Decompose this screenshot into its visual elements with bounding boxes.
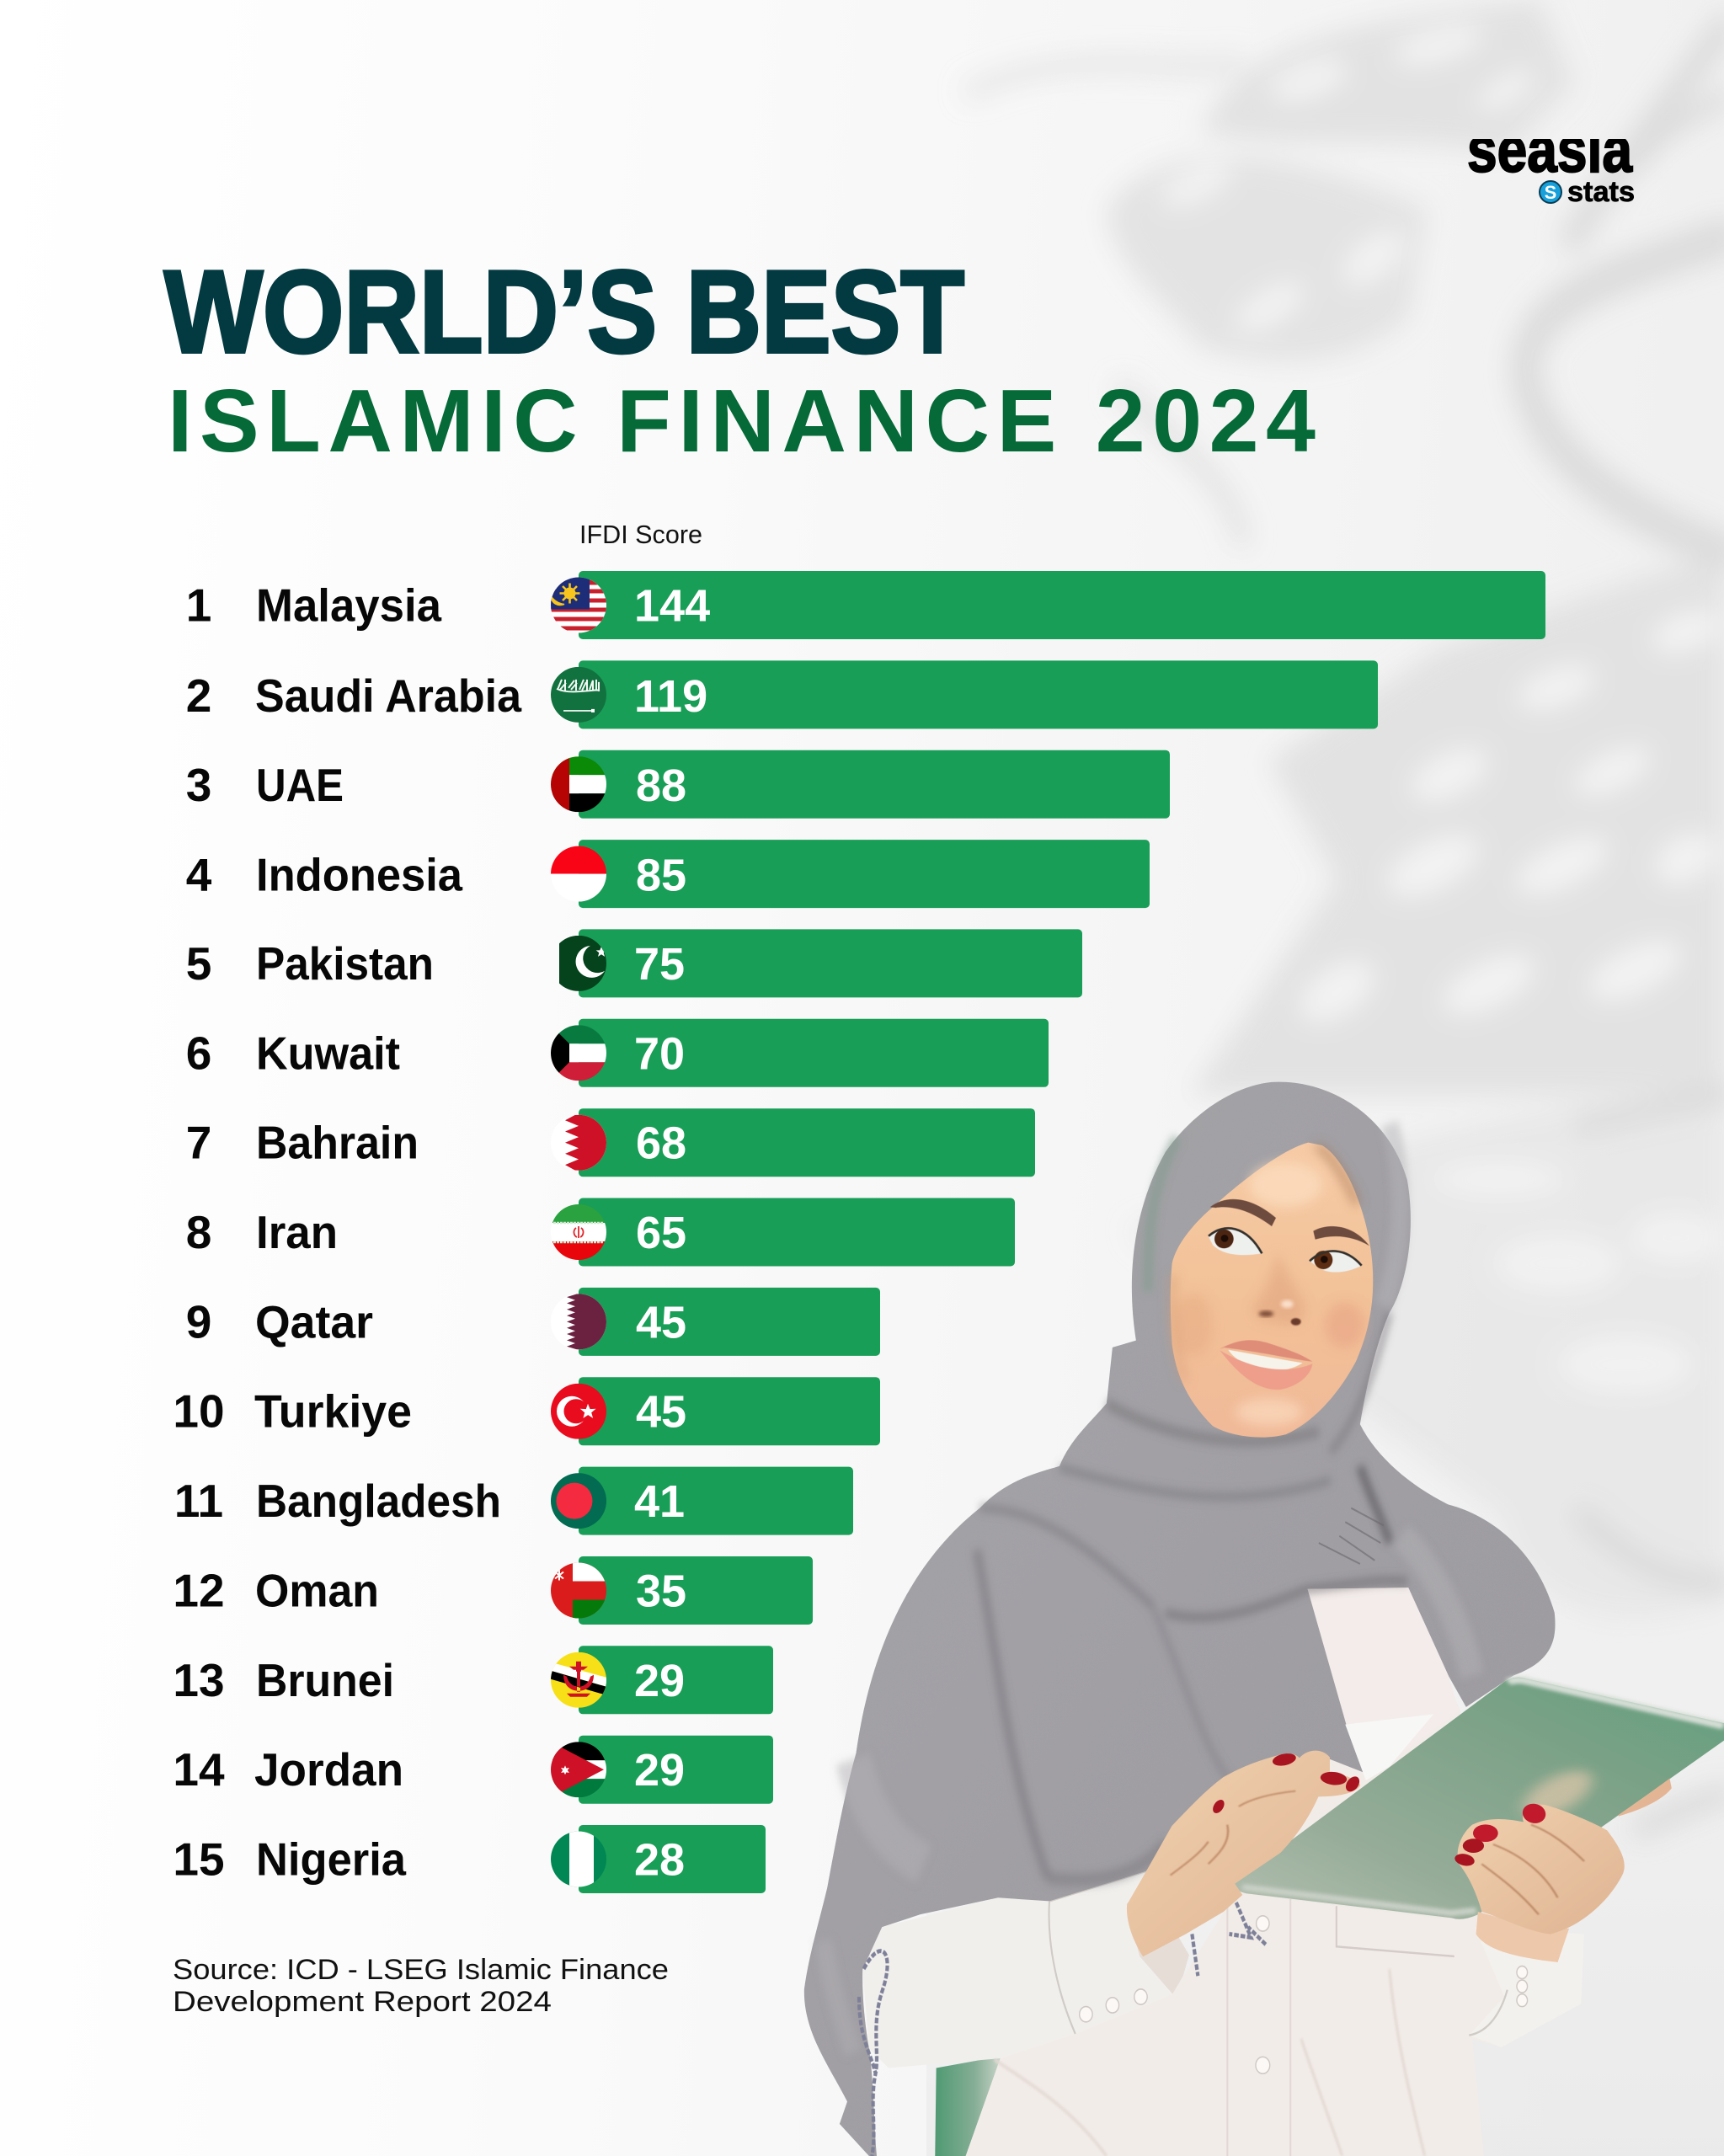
flag: Malaysia xyxy=(551,578,606,633)
row 8: Iran: 65 xyxy=(636,1208,686,1258)
row 1: Malaysia: 144 xyxy=(634,581,710,632)
row 11: Bangladesh: Bangladesh xyxy=(256,1475,501,1527)
row 1: Malaysia xyxy=(186,571,1545,639)
row 3: UAE xyxy=(186,750,1170,819)
subtitle: ISLAMIC FINANCE 2024 xyxy=(168,371,1316,471)
row 5: Pakistan: 5 xyxy=(186,937,211,990)
row 4: Indonesia: 4 xyxy=(186,849,212,901)
row 5: Pakistan: 75 xyxy=(634,939,685,990)
logo wordmark: seasia: seasia xyxy=(1467,115,1633,186)
source note: Development Report 2024 xyxy=(173,1986,552,2018)
row 6: Kuwait xyxy=(186,1019,1049,1087)
row 4: Indonesia xyxy=(186,840,1150,908)
row 14: Jordan: Jordan xyxy=(254,1743,403,1796)
flag: Oman xyxy=(551,1563,606,1619)
row 12: Oman: Oman xyxy=(255,1565,379,1617)
row 11: Bangladesh: 11 xyxy=(174,1475,223,1527)
logo wordmark: stats: stats xyxy=(1567,176,1635,208)
row 6: Kuwait: Kuwait xyxy=(256,1027,400,1079)
flag: Jordan xyxy=(551,1742,606,1797)
flag: Iran xyxy=(551,1204,606,1260)
row 1: Malaysia: Malaysia xyxy=(256,579,441,632)
row 13: Brunei: Brunei xyxy=(256,1654,394,1706)
logo icon: blue circle: S xyxy=(1545,182,1556,203)
row 8: Iran: Iran xyxy=(256,1206,338,1258)
row 2: Saudi Arabia: 119 xyxy=(634,671,707,722)
photo: woman in hijab with tablet xyxy=(804,1082,1724,2156)
row 13: Brunei xyxy=(173,1646,773,1714)
row 8: Iran xyxy=(186,1198,1015,1267)
row 4: Indonesia: Indonesia xyxy=(256,849,462,901)
right hand xyxy=(1619,1779,1672,1817)
face xyxy=(1171,1143,1373,1438)
flag: Saudi Arabia xyxy=(551,667,606,723)
row 7: Bahrain: 68 xyxy=(636,1118,686,1169)
row 15: Nigeria: Nigeria xyxy=(256,1833,406,1885)
title: WORLD’S BEST xyxy=(164,247,964,377)
row 15: Nigeria xyxy=(173,1825,766,1893)
row 15: Nigeria: 15 xyxy=(173,1833,225,1885)
logo xyxy=(1467,115,1635,208)
row 12: Oman xyxy=(173,1556,813,1625)
axis label: IFDI Score xyxy=(579,520,702,549)
tablet xyxy=(1233,1677,1724,1919)
row 14: Jordan: 14 xyxy=(173,1743,225,1796)
row 5: Pakistan: Pakistan xyxy=(256,937,434,990)
row 7: Bahrain: 7 xyxy=(186,1117,211,1169)
row 11: Bangladesh xyxy=(174,1467,853,1535)
row 9: Qatar xyxy=(186,1288,880,1356)
row 14: Jordan xyxy=(173,1736,773,1804)
source note xyxy=(173,1954,669,2018)
row 12: Oman: 35 xyxy=(636,1566,686,1617)
flag: Indonesia xyxy=(551,846,606,902)
hijab xyxy=(804,1082,1556,2156)
row 3: UAE: UAE xyxy=(256,759,344,811)
row 6: Kuwait: 70 xyxy=(634,1028,685,1079)
row 7: Bahrain: Bahrain xyxy=(256,1117,419,1169)
bar chart xyxy=(173,571,1545,1893)
row 2: Saudi Arabia: Saudi Arabia xyxy=(255,670,521,722)
row 11: Bangladesh: 41 xyxy=(634,1476,685,1527)
row 10: Turkiye: 10 xyxy=(173,1385,225,1438)
source note: Source: ICD - LSEG Islamic Finance xyxy=(173,1954,669,1986)
row 5: Pakistan xyxy=(186,929,1082,997)
shirt xyxy=(862,1588,1584,2156)
row 10: Turkiye: Turkiye xyxy=(254,1385,412,1438)
left hand xyxy=(1127,1751,1360,1956)
logo icon: blue circle xyxy=(1540,181,1561,203)
row 13: Brunei: 29 xyxy=(634,1656,685,1706)
row 9: Qatar: Qatar xyxy=(255,1295,373,1348)
row 3: UAE: 88 xyxy=(636,760,686,811)
flag: Bahrain xyxy=(551,1115,606,1171)
row 2: Saudi Arabia xyxy=(186,660,1378,728)
row 4: Indonesia: 85 xyxy=(636,851,686,901)
flag: UAE xyxy=(551,756,606,812)
flag: Bangladesh xyxy=(551,1473,606,1529)
row 6: Kuwait: 6 xyxy=(186,1027,211,1079)
flag: Qatar xyxy=(551,1294,606,1349)
hands xyxy=(1127,1751,1672,1962)
row 8: Iran: 8 xyxy=(186,1206,211,1258)
row 10: Turkiye: 45 xyxy=(636,1387,686,1438)
flag: Pakistan xyxy=(559,936,606,991)
flag: Turkiye xyxy=(551,1384,606,1439)
row 3: UAE: 3 xyxy=(186,759,211,811)
flag: Nigeria xyxy=(551,1831,606,1886)
row 7: Bahrain xyxy=(186,1108,1035,1177)
row 13: Brunei: 13 xyxy=(173,1654,225,1706)
row 2: Saudi Arabia: 2 xyxy=(186,670,211,722)
row 14: Jordan: 29 xyxy=(634,1745,685,1796)
row 1: Malaysia: 1 xyxy=(186,579,211,632)
row 12: Oman: 12 xyxy=(173,1565,225,1617)
flag: Brunei xyxy=(551,1652,606,1708)
flag: Kuwait xyxy=(551,1025,606,1081)
row 9: Qatar: 9 xyxy=(186,1295,211,1348)
row 9: Qatar: 45 xyxy=(636,1297,686,1348)
row 10: Turkiye xyxy=(173,1377,880,1445)
row 15: Nigeria: 28 xyxy=(634,1834,685,1885)
